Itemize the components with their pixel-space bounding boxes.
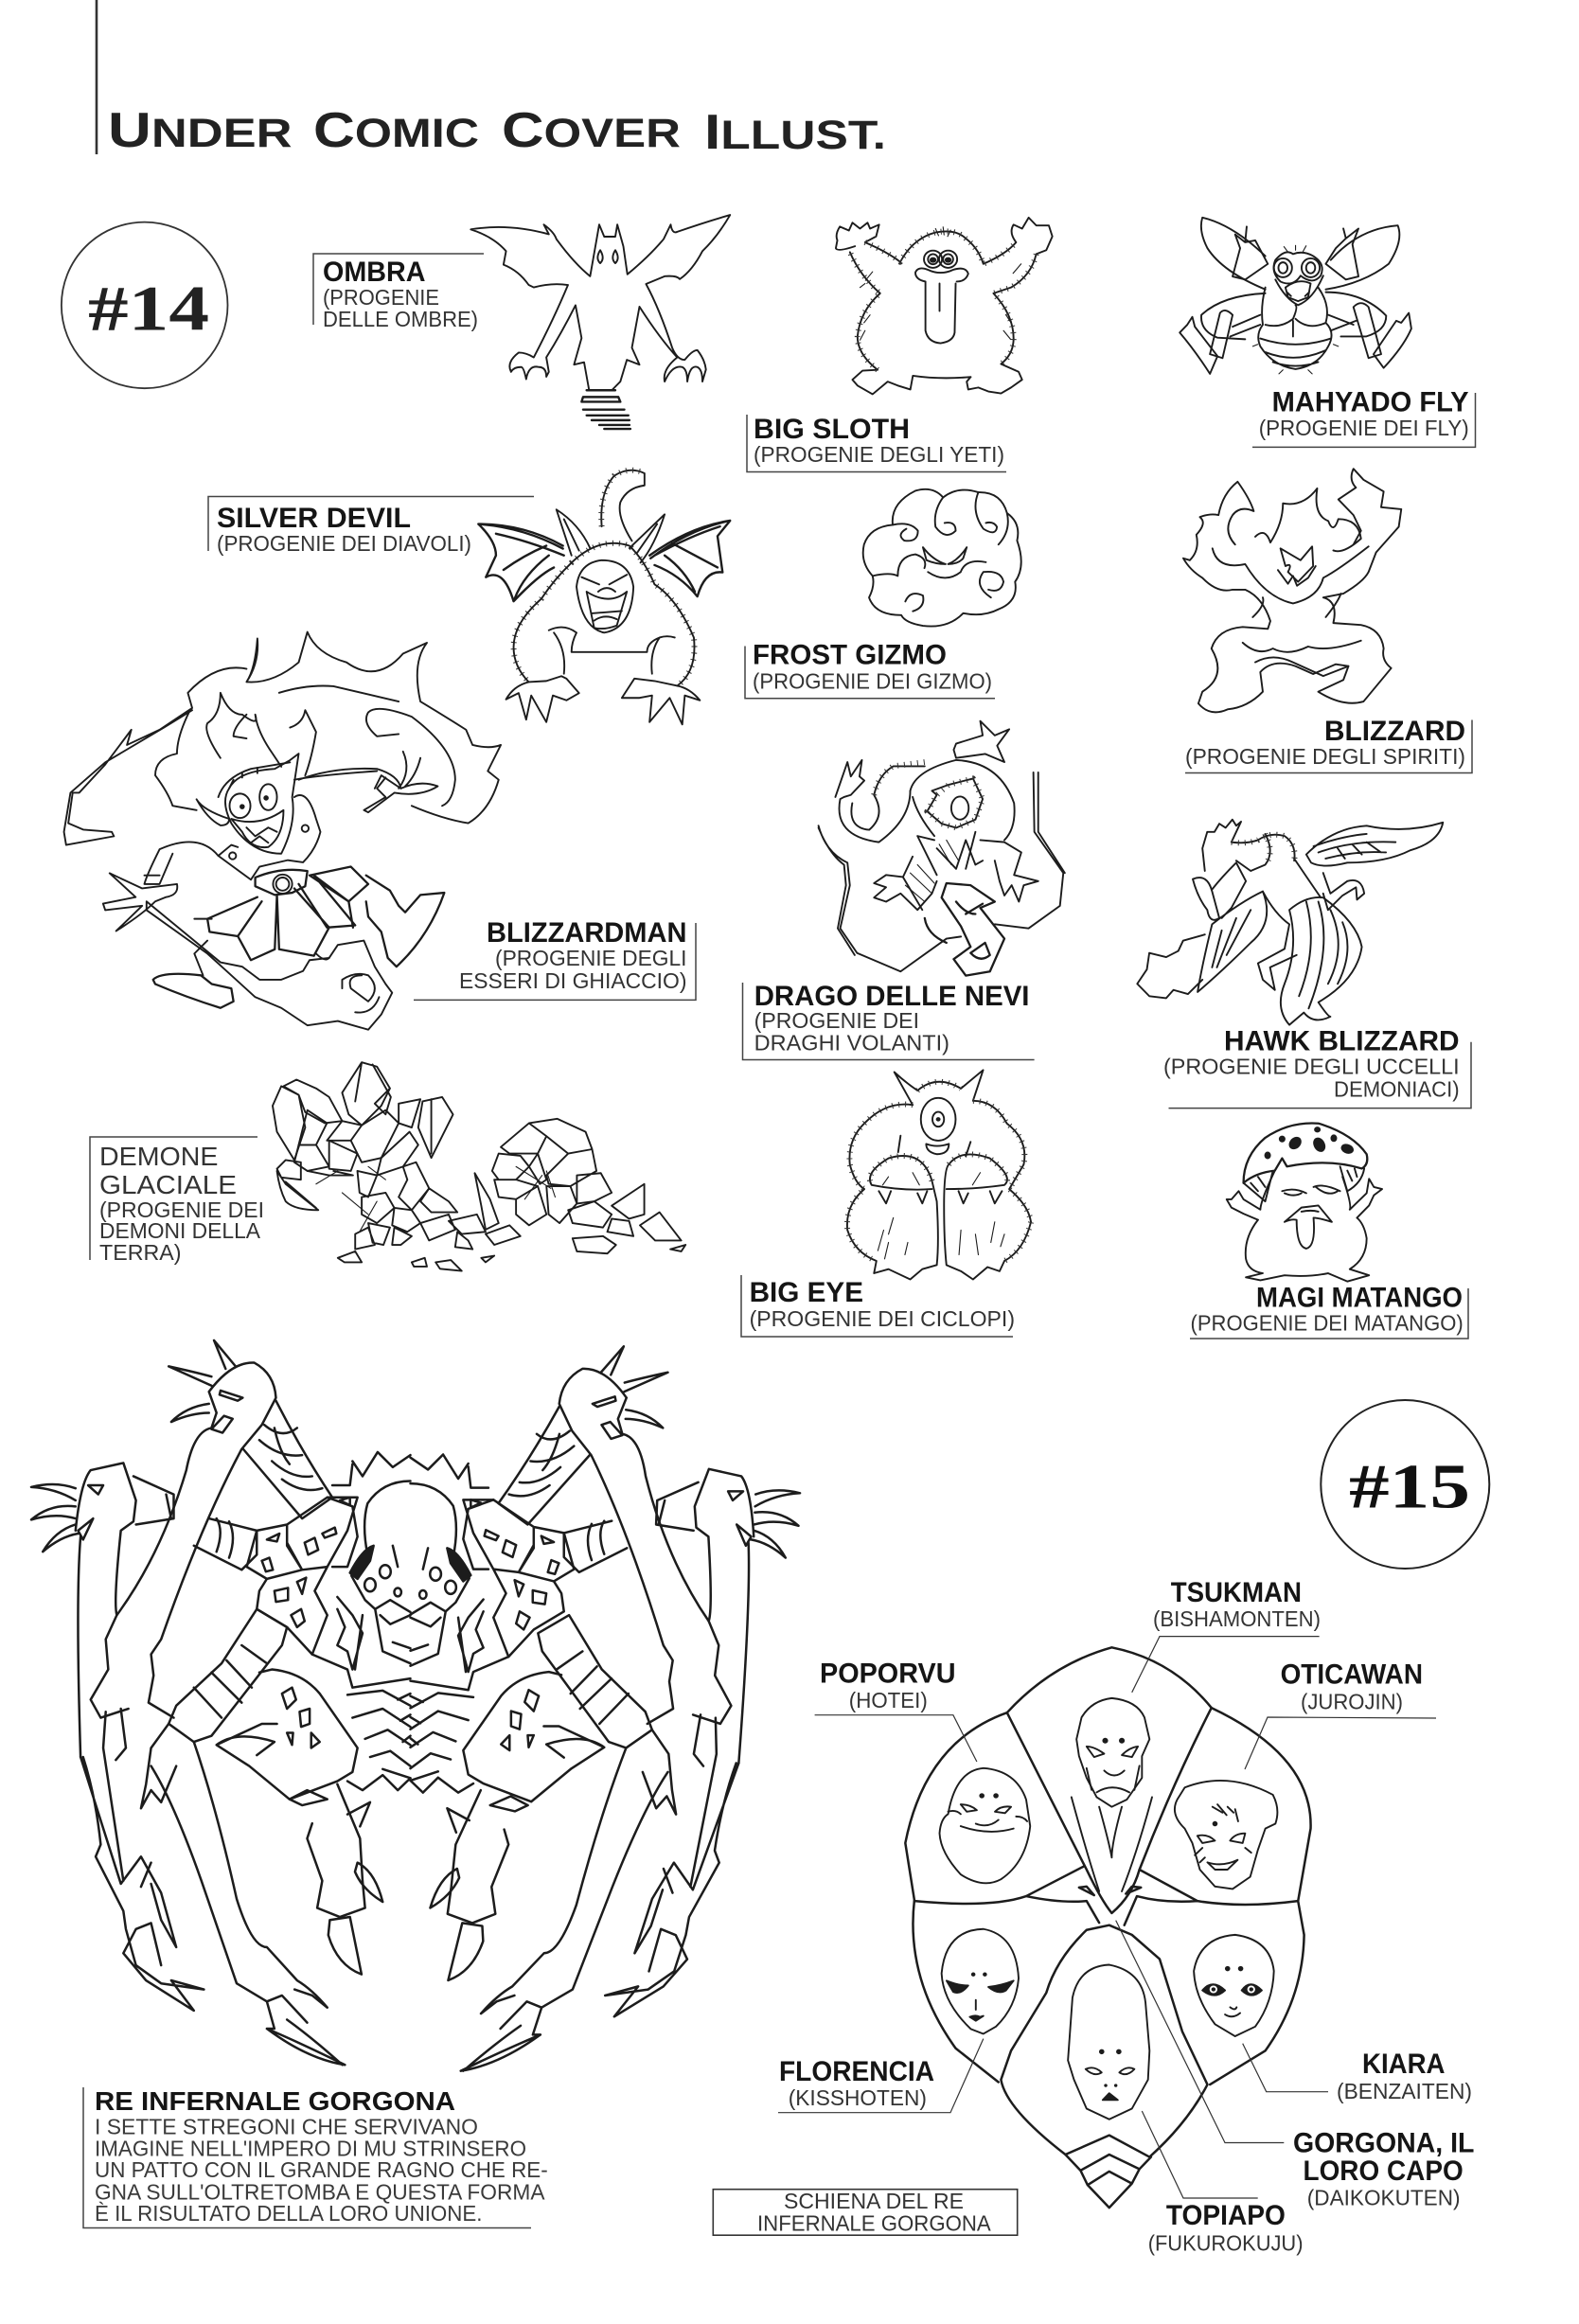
label: Gorgona, il loro capo: GORGONA, IL xyxy=(1293,2128,1474,2158)
label: Magi Matango: MAGI MATANGO xyxy=(1256,1282,1463,1314)
label: Tsukman xyxy=(1132,1577,1321,1693)
label: Florencia xyxy=(778,2039,984,2113)
title: ILLUST. xyxy=(704,105,886,160)
label: Demone Glaciale: GLACIALE xyxy=(99,1170,237,1199)
face: Topiapo xyxy=(1068,1965,1149,2120)
label: Florencia: (KISSHOTEN) xyxy=(789,2085,927,2110)
label: Hawk Blizzard: (PROGENIE DEGLI UCCELLI xyxy=(1163,1055,1460,1079)
icon: Magi Matango creature xyxy=(1227,1123,1382,1282)
callout: Schiena del Re Infernale Gorgona xyxy=(713,2189,1018,2236)
label: Demone Glaciale: TERRA) xyxy=(99,1240,182,1265)
label: Ombra xyxy=(313,254,484,331)
label: Kiara xyxy=(1243,2044,1472,2103)
label: Big Eye: (PROGENIE DEI CICLOPI) xyxy=(750,1306,1015,1331)
face: Poporvu xyxy=(940,1768,1030,1883)
label: Silver Devil: SILVER DEVIL xyxy=(217,503,411,534)
label: Poporvu xyxy=(815,1659,977,1762)
icon: Frost Gizmo creature xyxy=(863,489,1021,627)
label: Big Sloth: BIG SLOTH xyxy=(754,414,910,445)
label: Kiara: KIARA xyxy=(1362,2049,1445,2080)
label: Big Sloth: (PROGENIE DEGLI YETI) xyxy=(754,442,1004,467)
label: Demone Glaciale: DEMONI DELLA xyxy=(99,1218,261,1243)
label: Poporvu: (HOTEI) xyxy=(849,1688,928,1712)
label: Frost Gizmo: (PROGENIE DEI GIZMO) xyxy=(753,668,992,693)
label: Big Eye xyxy=(741,1275,1015,1337)
label: Gorgona, il loro capo: (DAIKOKUTEN) xyxy=(1307,2186,1460,2210)
face: Kiara xyxy=(1194,1935,1274,2036)
badge: #14 xyxy=(62,222,227,388)
label: Magi Matango: (PROGENIE DEI MATANGO) xyxy=(1191,1311,1464,1336)
label: Re Infernale Gorgona xyxy=(83,2086,548,2228)
label: Big Eye: BIG EYE xyxy=(750,1277,863,1308)
label: Drago delle Nevi: DRAGHI VOLANTI) xyxy=(754,1030,949,1055)
label: Poporvu: POPORVU xyxy=(820,1659,956,1689)
face: Oticawan xyxy=(1175,1781,1277,1889)
icon: Ombra creature xyxy=(470,215,730,429)
label: Re Infernale Gorgona: GNA SULL'OLTRETOMBA E QUESTA FORMA xyxy=(95,2179,545,2204)
label: Re Infernale Gorgona: RE INFERNALE GORGONA xyxy=(95,2086,455,2116)
icon: Mahyado Fly creature xyxy=(1180,218,1411,374)
face: Tsukman xyxy=(1076,1698,1149,1807)
icon: Blizzardman creature xyxy=(64,632,501,1030)
label: Blizzard: BLIZZARD xyxy=(1324,716,1465,747)
label: Ombra: OMBRA xyxy=(323,257,426,288)
label: Topiapo: (FUKUROKUJU) xyxy=(1148,2231,1303,2256)
label: Demone Glaciale: DEMONE xyxy=(99,1142,218,1171)
label: Blizzard xyxy=(1185,716,1472,772)
label: Topiapo: TOPIAPO xyxy=(1166,2200,1286,2231)
label: Oticawan xyxy=(1245,1659,1436,1769)
label: Blizzardman xyxy=(414,917,696,1000)
label: Oticawan: (JUROJIN) xyxy=(1301,1690,1403,1714)
shell plates xyxy=(905,1647,1311,2208)
callout: Schiena del Re Infernale Gorgona: SCHIENA DEL RE xyxy=(784,2189,964,2213)
face: Florencia xyxy=(942,1929,1019,2033)
callout: Schiena del Re Infernale Gorgona: INFERNALE GORGONA xyxy=(757,2211,991,2236)
label: Big Sloth xyxy=(747,414,1006,471)
label: Mahyado Fly: (PROGENIE DEI FLY) xyxy=(1259,416,1469,440)
title: COMIC xyxy=(313,103,479,158)
label: Drago delle Nevi xyxy=(742,981,1035,1060)
label: Mahyado Fly xyxy=(1252,387,1475,447)
icon: Re Infernale Gorgona spider xyxy=(31,1340,807,2071)
label: Florencia: FLORENCIA xyxy=(779,2056,934,2087)
label: Blizzard: (PROGENIE DEGLI SPIRITI) xyxy=(1185,744,1465,769)
label: Silver Devil xyxy=(208,496,534,556)
label: Re Infernale Gorgona: I SETTE STREGONI CHE SERVIVANO xyxy=(95,2115,478,2139)
label: Silver Devil: (PROGENIE DEI DIAVOLI) xyxy=(217,531,471,556)
label: Drago delle Nevi: (PROGENIE DEI xyxy=(754,1008,919,1033)
label: Blizzardman: ESSERI DI GHIACCIO) xyxy=(459,968,687,993)
icon: Big Sloth creature xyxy=(836,218,1053,394)
label: Blizzardman: BLIZZARDMAN xyxy=(487,917,687,949)
label: Hawk Blizzard xyxy=(1163,1026,1471,1109)
icon: Drago delle Nevi creature xyxy=(819,721,1065,976)
badge: #15: #15 xyxy=(1349,1452,1470,1522)
label: Kiara: (BENZAITEN) xyxy=(1337,2079,1472,2103)
badge: #14: #14 xyxy=(88,273,209,345)
title xyxy=(97,0,886,160)
icon: Hawk Blizzard creature xyxy=(1137,820,1443,1025)
icon: Big Eye creature xyxy=(847,1070,1031,1280)
icon: Silver Devil creature xyxy=(478,470,730,724)
label: Topiapo xyxy=(1142,2111,1303,2256)
label: Hawk Blizzard: DEMONIACI) xyxy=(1334,1077,1460,1102)
label: Gorgona, il loro capo: LORO CAPO xyxy=(1303,2155,1464,2187)
label: Frost Gizmo xyxy=(745,640,995,699)
label: Re Infernale Gorgona: È IL RISULTATO DELLA LORO UNIONE. xyxy=(95,2201,483,2226)
icon: Demone Glaciale creature xyxy=(273,1062,685,1271)
label: Magi Matango xyxy=(1190,1282,1468,1339)
label: Drago delle Nevi: DRAGO DELLE NEVI xyxy=(754,981,1030,1012)
label: Blizzardman: (PROGENIE DEGLI xyxy=(495,946,687,970)
label: Oticawan: OTICAWAN xyxy=(1281,1659,1423,1691)
label: Tsukman: TSUKMAN xyxy=(1171,1577,1302,1608)
badge: #15 xyxy=(1321,1400,1489,1569)
label: Mahyado Fly: MAHYADO FLY xyxy=(1272,387,1469,418)
label: Re Infernale Gorgona: UN PATTO CON IL GRANDE RAGNO CHE RE- xyxy=(95,2157,548,2182)
label: Gorgona, il loro capo xyxy=(1116,1921,1474,2210)
diagram: back of the Infernal King with seven faces xyxy=(905,1647,1311,2208)
label: Frost Gizmo: FROST GIZMO xyxy=(753,640,947,671)
label: Demone Glaciale xyxy=(90,1137,264,1265)
label: Tsukman: (BISHAMONTEN) xyxy=(1153,1606,1321,1631)
label: Re Infernale Gorgona: IMAGINE NELL'IMPERO DI MU STRINSERO xyxy=(95,2137,526,2161)
title: COVER xyxy=(502,103,681,158)
label: Hawk Blizzard: HAWK BLIZZARD xyxy=(1224,1026,1460,1056)
icon: Blizzard spirit creature xyxy=(1183,469,1401,712)
label: Demone Glaciale: (PROGENIE DEI xyxy=(99,1197,264,1222)
label: Ombra: DELLE OMBRE) xyxy=(323,307,478,331)
title: UNDER xyxy=(108,103,292,158)
label: Ombra: (PROGENIE xyxy=(323,285,439,310)
